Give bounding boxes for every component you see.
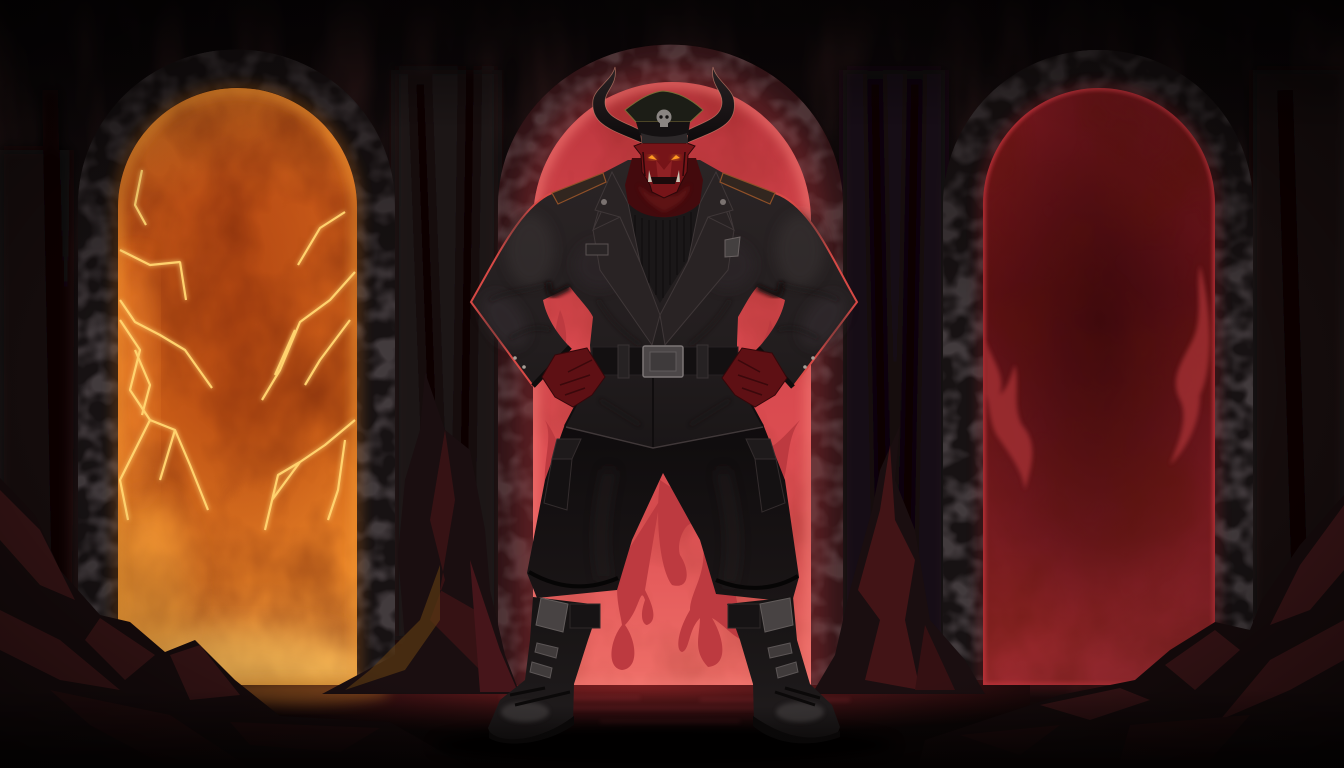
belt [592, 345, 738, 378]
ribbed sweater [622, 203, 704, 303]
legs [527, 424, 799, 602]
horns [593, 67, 734, 143]
flame silhouettes [545, 310, 800, 670]
epaulettes [552, 173, 775, 204]
badges and buttons [586, 199, 740, 257]
rocks: central left spire [322, 372, 520, 694]
portal: orange lightning [118, 88, 357, 685]
rocks: lower left [0, 478, 470, 768]
faint flames [985, 265, 1210, 490]
demon officer figure [471, 67, 857, 744]
lapels [593, 172, 734, 345]
jacket and arms [471, 160, 857, 448]
portal: red centre with flames [525, 75, 820, 690]
portal: dark crimson [975, 80, 1225, 690]
cargo pockets [544, 439, 785, 512]
portal glow halos [118, 82, 1215, 685]
right boot [727, 597, 840, 743]
left boot [488, 597, 600, 744]
bottom shadow [0, 690, 1344, 768]
head [634, 143, 695, 198]
stone arch: left [70, 40, 405, 690]
floor [210, 678, 1030, 768]
officer cap [625, 91, 703, 143]
rocks: lower right [918, 495, 1344, 768]
rocks: central right spire [812, 425, 985, 694]
skull badge [656, 110, 672, 127]
lightning bolts [120, 170, 355, 530]
hands [542, 348, 787, 407]
stone arch: middle [490, 40, 850, 700]
stone arch: right [935, 40, 1260, 690]
neck and chest [625, 158, 703, 217]
